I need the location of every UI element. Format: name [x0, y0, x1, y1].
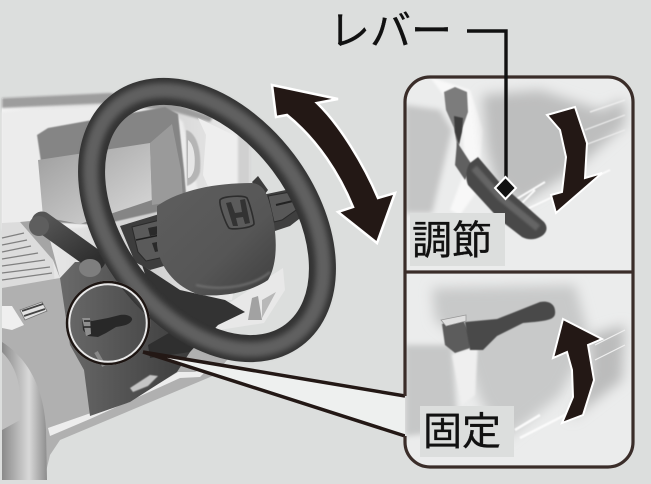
panel: lock [405, 272, 633, 467]
bracket [442, 318, 470, 353]
panel: adjust [405, 77, 633, 272]
column shroud dark area [60, 262, 190, 416]
label: adjust [410, 213, 505, 266]
right spoke switch [262, 187, 308, 232]
airbag pad [157, 183, 276, 295]
callout leader wedge [143, 352, 405, 436]
cluster hood [2, 93, 250, 300]
steering wheel hub [120, 176, 308, 345]
lower dashboard panels [2, 262, 235, 480]
double-headed adjustment arrow [272, 85, 395, 243]
lever pointer line [467, 31, 516, 199]
panel outline [405, 77, 633, 467]
arrow down [547, 107, 602, 213]
magnifier circle around lever [67, 282, 149, 366]
label: lock: 固定 [423, 411, 501, 454]
left vent [2, 221, 60, 292]
wiper stalk [29, 216, 101, 277]
label: lock [420, 406, 514, 457]
arrow up [553, 319, 602, 423]
adjust lever [455, 142, 547, 239]
honda logo [220, 196, 254, 229]
left spoke switch [120, 212, 178, 270]
label: lever: レバー [329, 8, 452, 54]
lever top knob [444, 87, 468, 150]
lower hub [142, 265, 245, 345]
label: adjust: 調節 [412, 219, 492, 263]
gauge ring behind wheel [186, 130, 200, 186]
right bracket [213, 268, 285, 331]
steering wheel rim [43, 46, 371, 394]
lock lever [465, 302, 555, 350]
dashboard illustration [2, 46, 371, 480]
